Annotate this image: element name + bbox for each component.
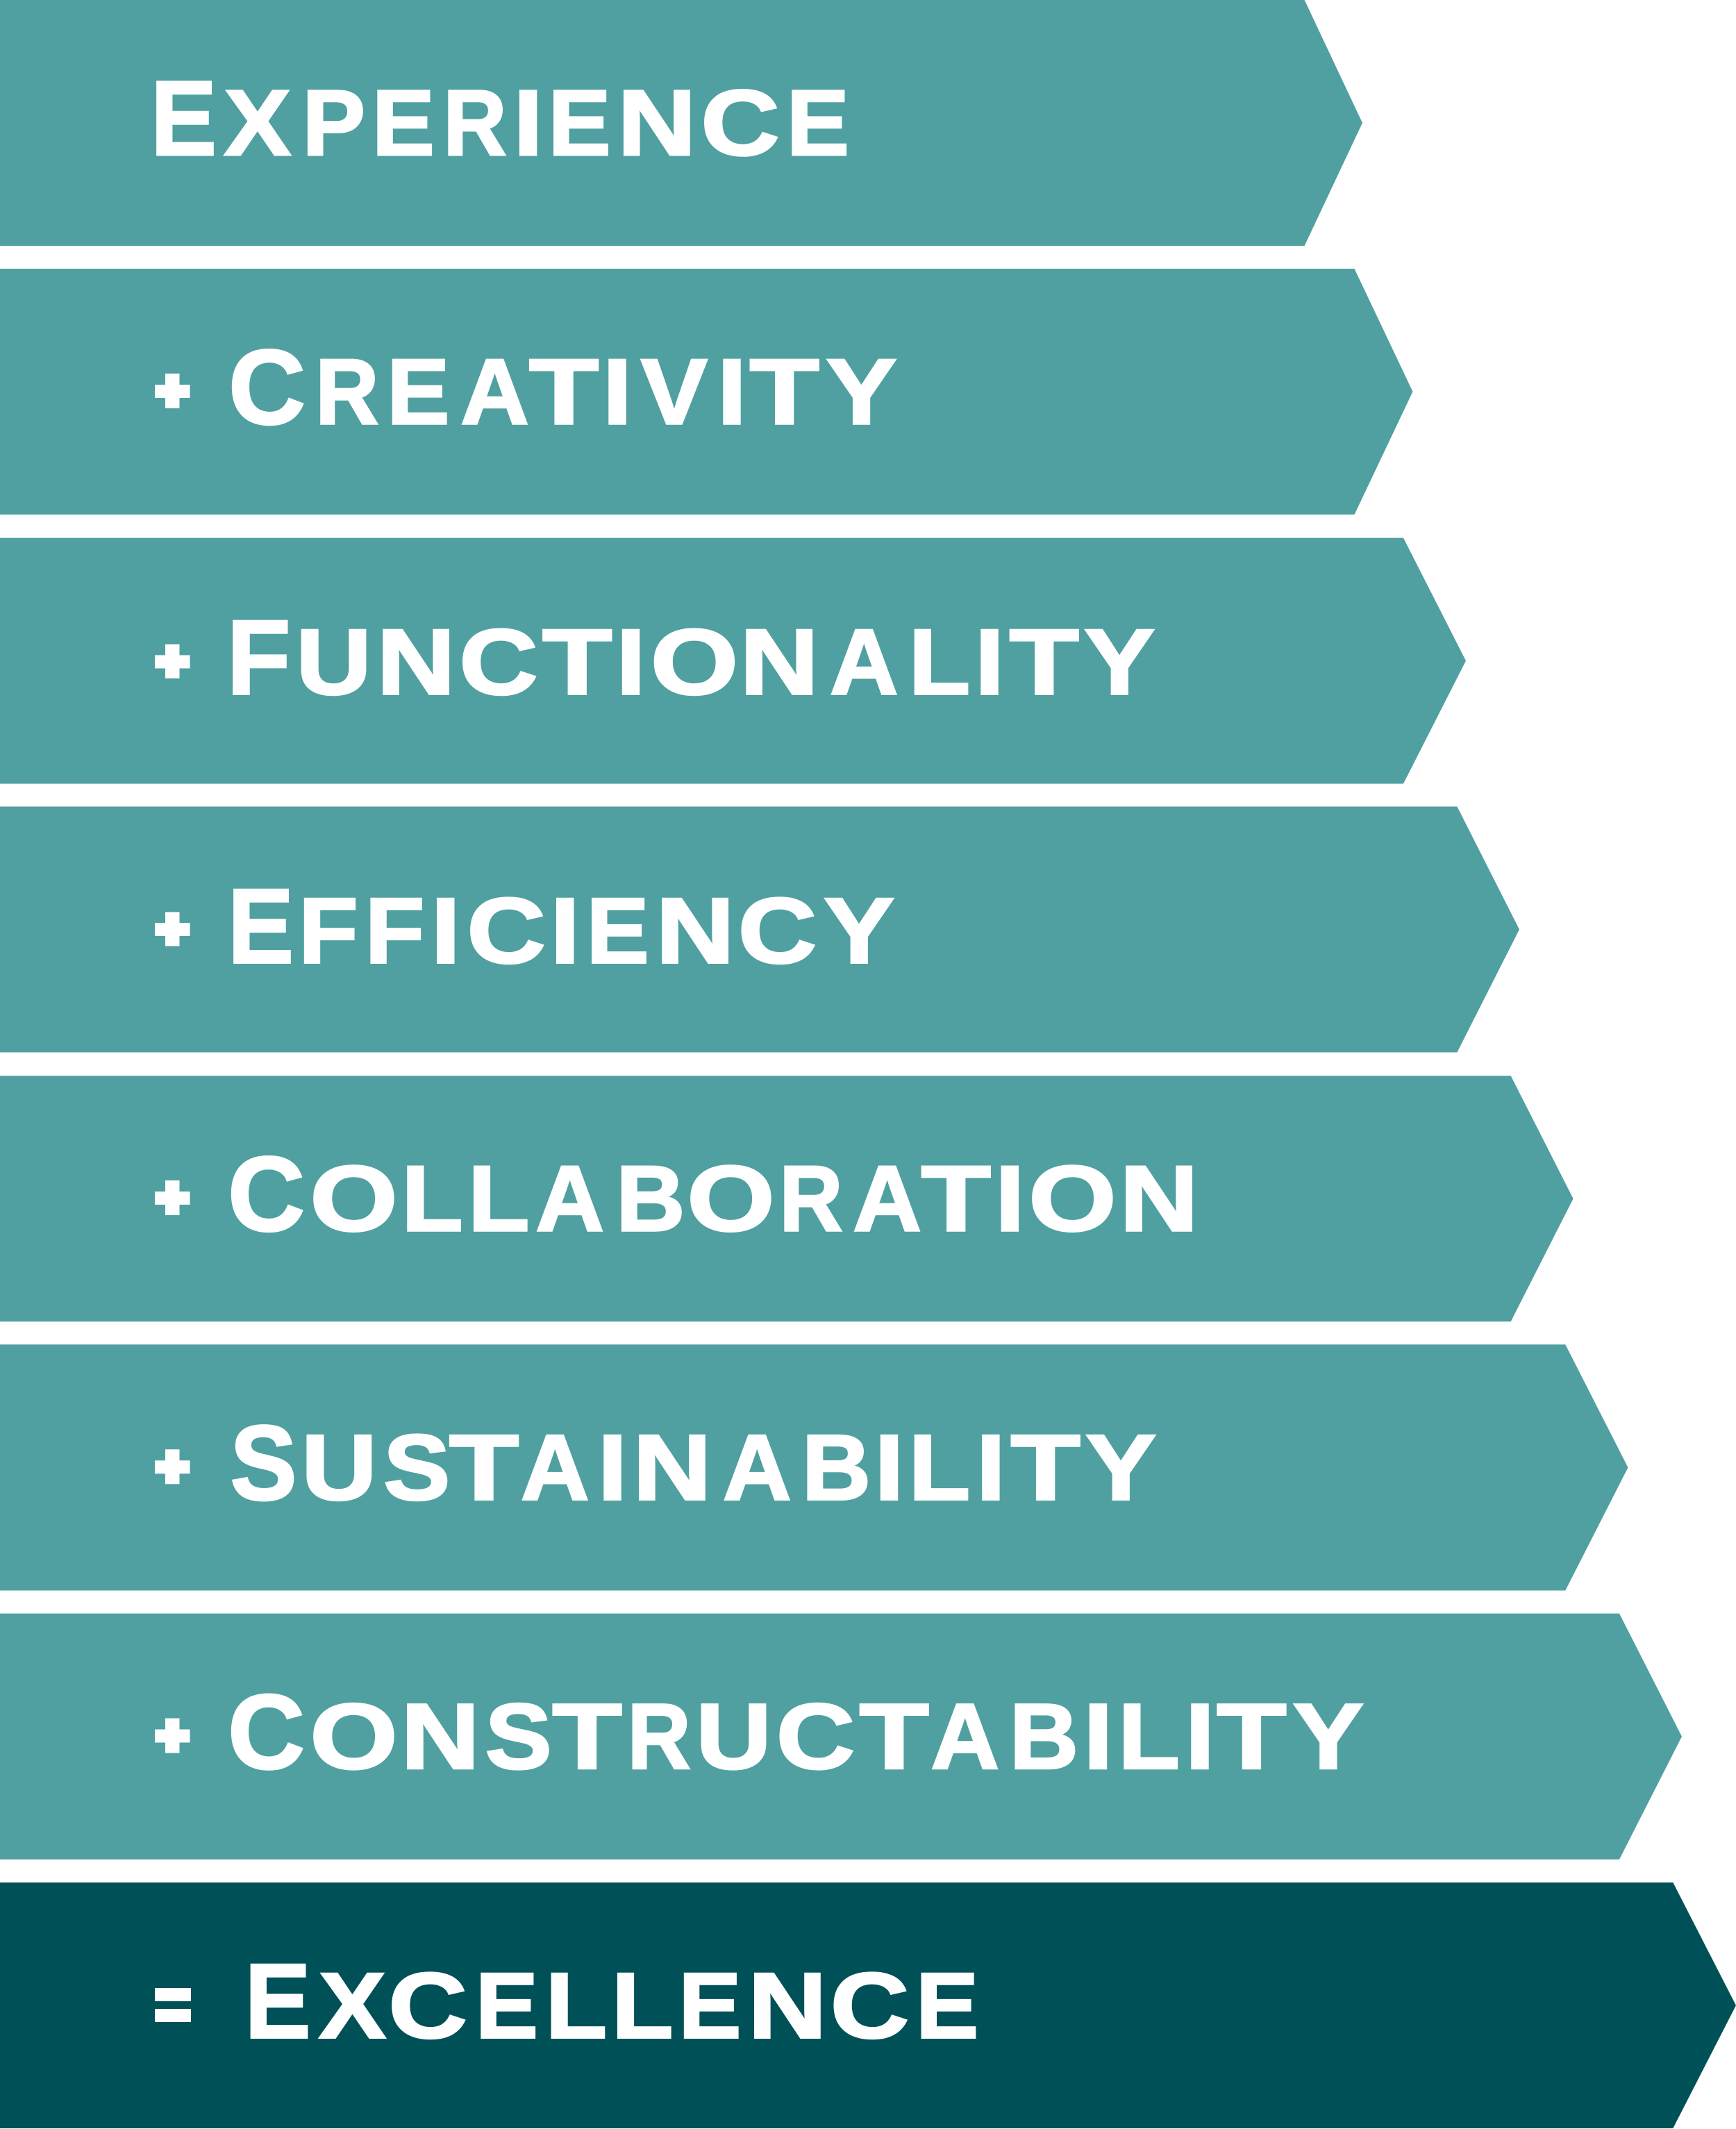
label: Efficiency: F	[365, 879, 424, 983]
label: Creativity: A	[460, 340, 529, 444]
label: Excellence: E	[244, 1942, 311, 2061]
label: Excellence: L	[612, 1954, 674, 2058]
icon: equals	[155, 1988, 191, 2022]
label: Experience: E	[787, 72, 849, 175]
label: Experience: E	[549, 72, 611, 175]
label: Efficiency: C	[467, 879, 546, 983]
label: Functionality: L	[909, 611, 970, 714]
icon: plus	[155, 1180, 190, 1215]
label: Functionality: T	[1010, 611, 1079, 714]
label: Collaboration: N	[1119, 1147, 1199, 1251]
label: Efficiency: Y	[824, 879, 894, 983]
label: Creativity: T	[529, 340, 599, 444]
label: Sustainability: T	[449, 1417, 519, 1519]
label: Constructability: I	[1185, 1685, 1215, 1789]
bar: Efficiency	[0, 807, 1519, 1053]
label: Constructability: C	[228, 1673, 305, 1792]
bar: Experience	[0, 0, 1362, 246]
bar: Constructability	[0, 1614, 1682, 1860]
label: Constructability: I	[1083, 1685, 1113, 1789]
label: Constructability: S	[485, 1685, 552, 1789]
label: Collaboration: O	[687, 1147, 775, 1251]
label: Constructability: N	[401, 1685, 480, 1789]
label: Functionality: I	[616, 611, 646, 714]
bar: Sustainability	[0, 1344, 1628, 1590]
label: Experience: X	[224, 72, 291, 175]
label: Constructability: B	[1010, 1685, 1078, 1789]
label: Efficiency: C	[738, 879, 817, 983]
label: Sustainability: U	[301, 1417, 377, 1519]
label: Excellence: L	[546, 1954, 607, 2058]
label: Efficiency: N	[656, 879, 735, 983]
icon: plus	[155, 1449, 190, 1484]
label: Experience: E	[372, 72, 435, 175]
label: Collaboration: A	[853, 1147, 921, 1251]
label: Excellence: N	[748, 1954, 827, 2058]
label: Experience: E	[151, 59, 217, 178]
label: Excellence: C	[388, 1954, 467, 2058]
label: Efficiency: E	[586, 879, 649, 983]
label: Experience: P	[302, 72, 365, 175]
label: Constructability: T	[860, 1685, 929, 1789]
label: Sustainability: S	[383, 1417, 450, 1519]
label: Collaboration: L	[468, 1147, 529, 1251]
label: Constructability: O	[310, 1685, 398, 1789]
label: Functionality: I	[975, 611, 1004, 714]
label: Sustainability: A	[723, 1417, 792, 1519]
label: Collaboration: O	[1028, 1147, 1117, 1251]
label: Constructability: R	[628, 1685, 691, 1789]
label: Functionality: T	[542, 611, 612, 714]
label: Experience: N	[617, 72, 696, 175]
label: Creativity: R	[315, 340, 378, 444]
label: Experience: I	[513, 72, 543, 175]
label: Functionality: O	[651, 611, 738, 714]
label: Collaboration: A	[535, 1147, 604, 1251]
label: Creativity: I	[717, 340, 746, 444]
label: Efficiency: E	[228, 867, 294, 986]
label: Sustainability: L	[909, 1417, 970, 1519]
label: Constructability: A	[930, 1685, 999, 1789]
bar: Creativity	[0, 269, 1412, 515]
bar: Collaboration	[0, 1076, 1574, 1321]
label: Sustainability: Y	[1085, 1417, 1156, 1519]
label: Sustainability: I	[874, 1417, 904, 1519]
label: Functionality: U	[296, 611, 372, 714]
label: Experience: R	[443, 72, 507, 175]
label: Constructability: C	[776, 1685, 855, 1789]
label: Constructability: T	[1217, 1685, 1287, 1789]
label: Functionality: A	[830, 611, 899, 714]
label: Functionality: C	[459, 611, 538, 714]
label: Creativity: T	[750, 340, 819, 444]
label: Efficiency: I	[550, 879, 580, 983]
label: Collaboration: C	[228, 1135, 305, 1253]
label: Sustainability: T	[1011, 1417, 1080, 1519]
label: Sustainability: S	[231, 1404, 297, 1522]
label: Creativity: E	[387, 340, 449, 444]
label: Sustainability: N	[633, 1417, 712, 1519]
label: Excellence: E	[916, 1954, 978, 2058]
label: Excellence: E	[678, 1954, 741, 2058]
icon: plus	[155, 374, 190, 408]
bar: Excellence	[0, 1882, 1736, 2128]
icon: plus	[155, 912, 190, 946]
label: Functionality: N	[376, 611, 456, 714]
label: Creativity: C	[228, 328, 306, 446]
label: Excellence: E	[476, 1954, 538, 2058]
label: Constructability: T	[552, 1685, 622, 1789]
label: Sustainability: I	[976, 1417, 1005, 1519]
label: Efficiency: I	[431, 879, 460, 983]
label: Collaboration: R	[779, 1147, 843, 1251]
label: Functionality: Y	[1084, 611, 1155, 714]
label: Experience: C	[701, 72, 780, 175]
label: Excellence: C	[831, 1954, 909, 2058]
icon: plus	[155, 1718, 190, 1753]
label: Efficiency: F	[299, 879, 358, 983]
label: Sustainability: I	[598, 1417, 627, 1519]
label: Collaboration: O	[310, 1147, 398, 1251]
icon: plus	[155, 644, 190, 678]
label: Sustainability: A	[521, 1417, 589, 1519]
label: Constructability: L	[1118, 1685, 1180, 1789]
label: Creativity: V	[641, 340, 708, 444]
label: Collaboration: L	[401, 1147, 463, 1251]
label: Functionality: F	[226, 599, 290, 717]
bar: Functionality	[0, 538, 1466, 784]
label: Collaboration: B	[616, 1147, 685, 1251]
label: Constructability: U	[696, 1685, 771, 1789]
label: Creativity: I	[603, 340, 632, 444]
label: Collaboration: I	[995, 1147, 1025, 1251]
label: Collaboration: T	[921, 1147, 991, 1251]
label: Functionality: N	[740, 611, 819, 714]
label: Constructability: Y	[1293, 1685, 1364, 1789]
label: Creativity: Y	[826, 340, 896, 444]
label: Sustainability: B	[802, 1417, 871, 1519]
label: Excellence: X	[319, 1954, 386, 2058]
